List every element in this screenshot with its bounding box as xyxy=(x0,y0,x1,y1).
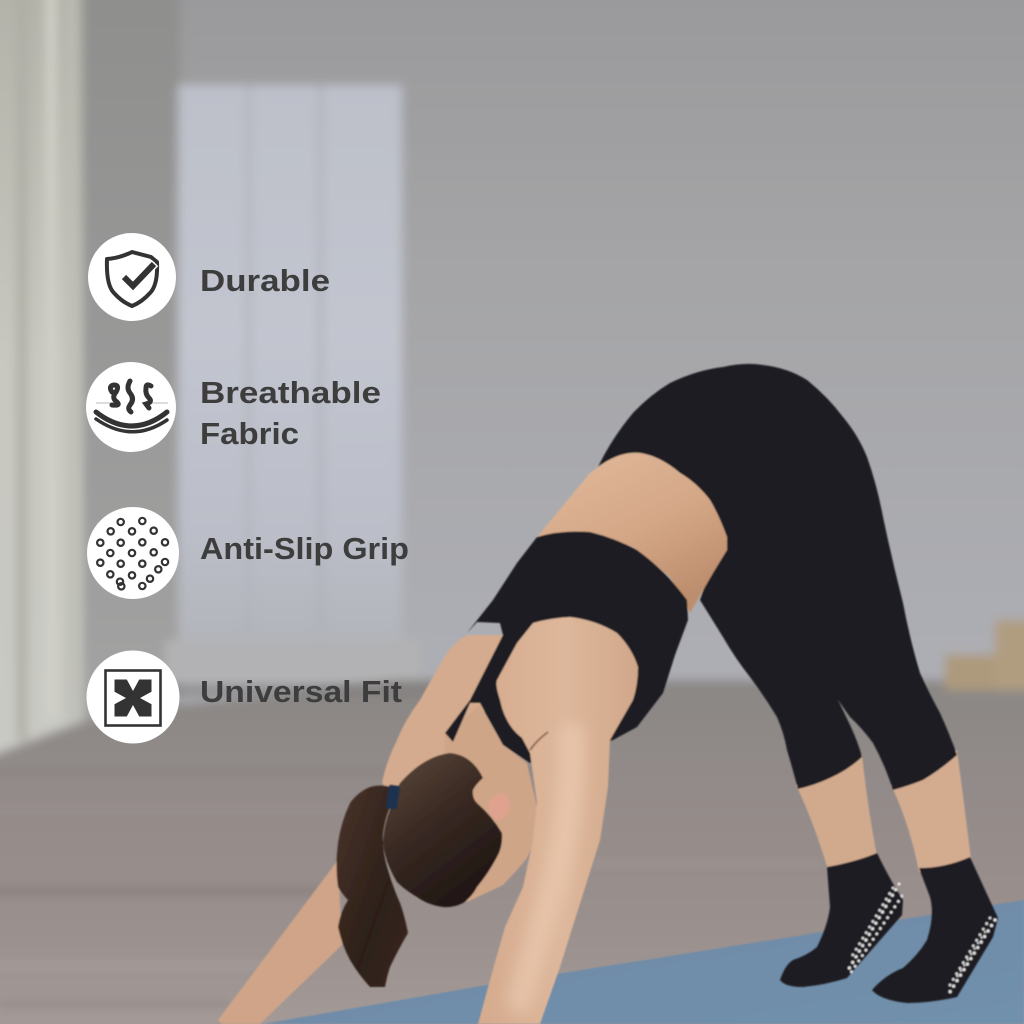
person in downward dog pose xyxy=(218,364,998,1024)
label: Breathable Fabric: Fabric xyxy=(200,416,299,451)
midriff skin xyxy=(537,453,727,613)
ear xyxy=(488,793,510,821)
sports top xyxy=(445,532,688,763)
label: Anti-Slip Grip: Anti-Slip Grip xyxy=(200,531,409,566)
shoulder and near arm skin xyxy=(478,617,638,1024)
icon: expand arrows in frame xyxy=(86,650,180,744)
feature: Breathable Fabric xyxy=(86,362,381,452)
feature: Anti-Slip Grip xyxy=(87,507,409,599)
yoga mat xyxy=(263,900,1024,1024)
label: Breathable Fabric xyxy=(200,375,381,451)
near leg and hips legging xyxy=(598,364,957,790)
label: Durable: Durable xyxy=(200,263,330,298)
icon: air waves over fabric xyxy=(86,362,176,452)
label: Universal Fit: Universal Fit xyxy=(200,674,402,709)
far upper arm xyxy=(382,635,505,800)
icon: grip dots xyxy=(87,507,179,599)
ponytail xyxy=(336,786,408,987)
icon: shield with check xyxy=(88,233,176,321)
lower legs xyxy=(796,750,971,872)
label: Breathable Fabric: Breathable xyxy=(200,375,381,410)
feature: Durable xyxy=(88,233,330,321)
hair xyxy=(383,753,502,907)
feature: Universal Fit xyxy=(86,650,402,744)
neck and face xyxy=(440,705,537,902)
far leg legging xyxy=(700,495,862,789)
right sock xyxy=(872,857,998,1003)
left sock xyxy=(780,853,903,987)
armpit crease xyxy=(530,732,548,750)
hair band xyxy=(386,784,400,810)
far forearm xyxy=(218,860,342,1024)
arm highlight xyxy=(520,735,572,1000)
